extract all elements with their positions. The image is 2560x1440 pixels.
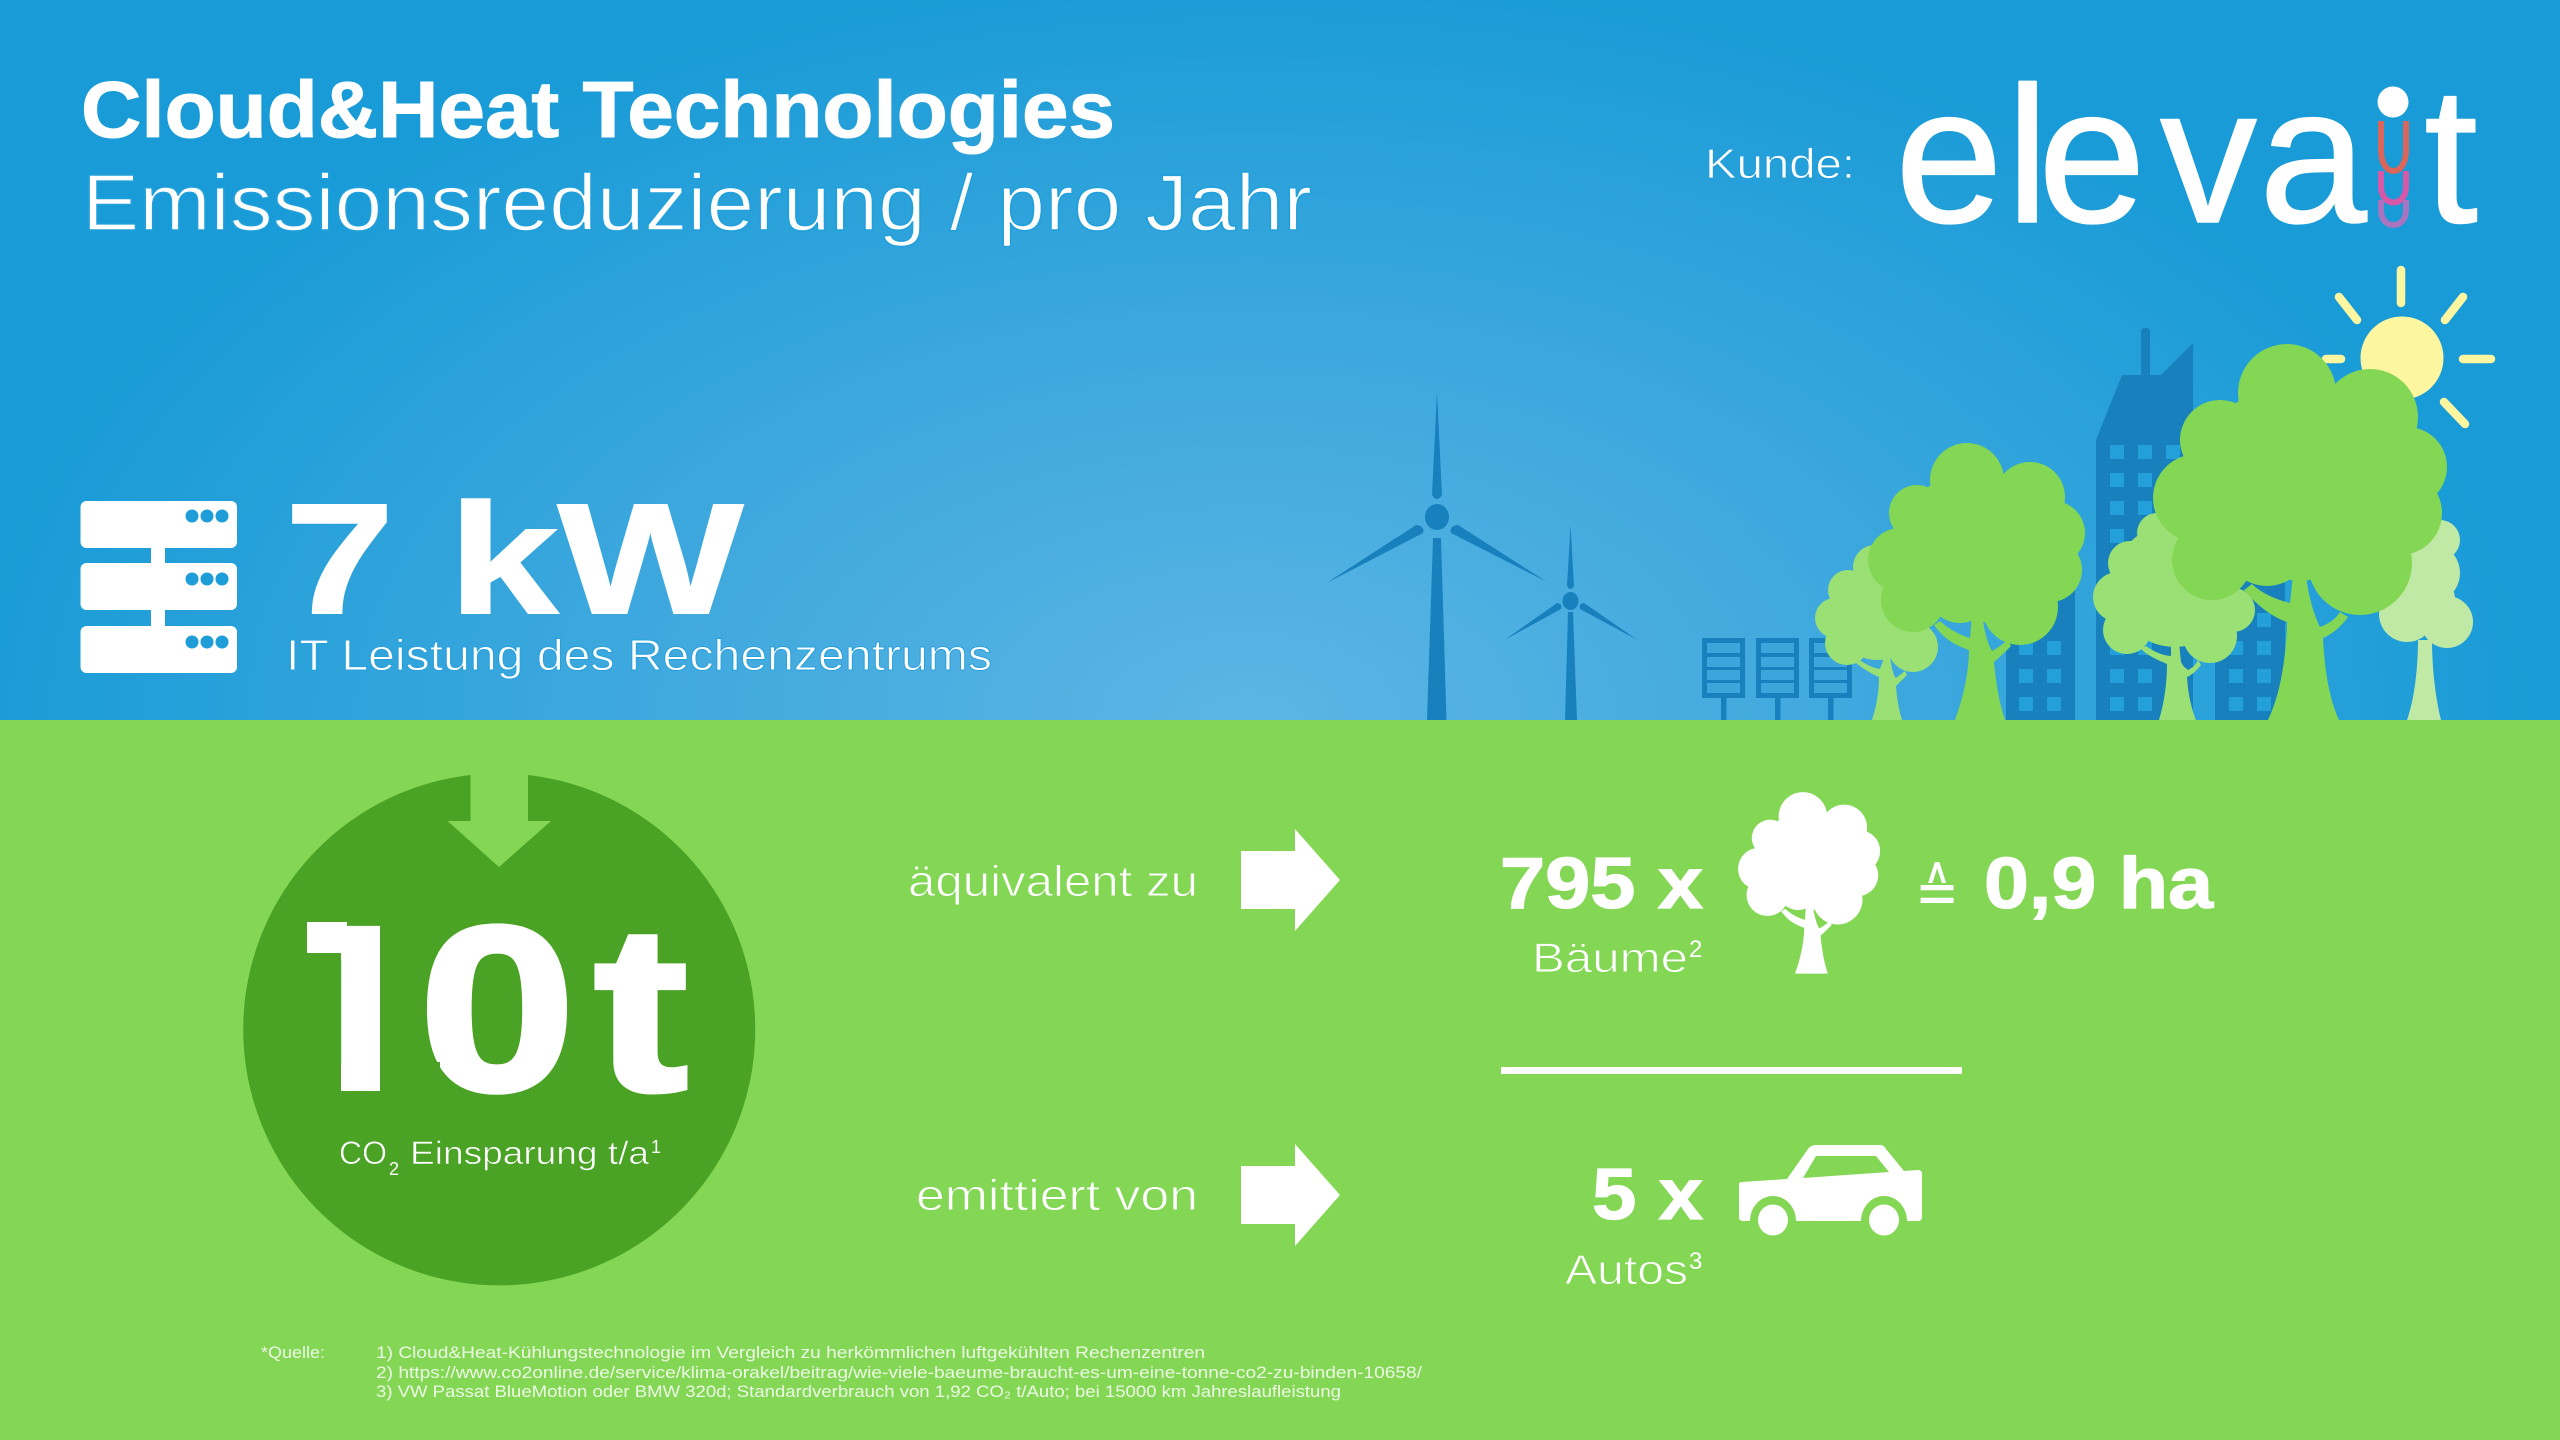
icon: car bbox=[1739, 1145, 1922, 1236]
customer label: Kunde: bbox=[1705, 140, 1855, 187]
icon: light tree far right bbox=[2379, 520, 2473, 720]
footnotes: *Quelle: bbox=[261, 1343, 325, 1362]
value: hectares: 0,9 ha bbox=[1984, 844, 2214, 924]
label: equivalent to: äquivalent zu bbox=[908, 857, 1198, 906]
value: trees: 795 x bbox=[1500, 844, 1703, 924]
savings caption: CO bbox=[339, 1135, 387, 1171]
caption: cars: 3 bbox=[1689, 1248, 1702, 1275]
icon: light tree centre right bbox=[2093, 513, 2255, 720]
footnotes: 2) https://www.co2online.de/service/klima-orakel/beitrag/wie-viele-baeume-braucht-es-um-eine-tonne-co2-zu-binden-10658/ bbox=[376, 1363, 1422, 1382]
footnotes: 1) Cloud&Heat-Kühlungstechnologie im Vergleich zu herkömmlichen luftgekühlten Rechenzentren bbox=[376, 1343, 1205, 1362]
symbol: corresponds to: ≙ bbox=[1915, 856, 1959, 930]
icon: sun bbox=[2326, 270, 2491, 424]
value: cars: 5 x bbox=[1592, 1155, 1703, 1235]
power value: 7 kW bbox=[285, 472, 744, 647]
footnotes bbox=[261, 1343, 1422, 1401]
icon: main tree centre bbox=[1868, 443, 2085, 720]
icon: city buildings bbox=[2006, 328, 2285, 720]
icon: solar panels bbox=[1702, 638, 1852, 720]
CO2 savings circle bbox=[243, 775, 755, 1285]
icon: light tree left bbox=[1815, 545, 1938, 720]
title: Cloud&Heat Technologies bbox=[81, 65, 1115, 154]
arrow: emitted bbox=[1241, 1144, 1340, 1246]
savings caption: Einsparung t/a bbox=[410, 1135, 649, 1171]
footnotes: 3) VW Passat BlueMotion oder BMW 320d; Standardverbrauch von 1,92 CO₂ t/Auto; bei 15000 km Jahreslaufleistung bbox=[376, 1382, 1341, 1401]
subtitle: Emissionsreduzierung / pro Jahr bbox=[82, 158, 1312, 247]
icon: server rack bbox=[80, 501, 237, 673]
caption: trees: 2 bbox=[1689, 936, 1702, 963]
savings value bbox=[307, 922, 688, 1095]
icon: small wind turbine bbox=[1504, 525, 1638, 720]
savings value: 10t bbox=[278, 878, 688, 1141]
icon: large main tree bbox=[2153, 344, 2447, 720]
panel: green ground bbox=[0, 720, 2560, 1440]
savings caption: 2 bbox=[389, 1159, 399, 1179]
caption: trees: Bäume bbox=[1532, 934, 1688, 981]
logo: elevait: elevait bbox=[1895, 47, 2478, 264]
label: emitted by: emittiert von bbox=[916, 1171, 1198, 1220]
arrow: equivalent bbox=[1241, 829, 1340, 931]
icon: large wind turbine bbox=[1326, 392, 1547, 720]
panel: blue sky background bbox=[0, 0, 2560, 720]
savings caption: 1 bbox=[651, 1137, 661, 1157]
icon: tree bbox=[1738, 792, 1880, 974]
caption: cars: Autos bbox=[1565, 1246, 1688, 1293]
power caption: IT Leistung des Rechenzentrums bbox=[286, 631, 992, 680]
